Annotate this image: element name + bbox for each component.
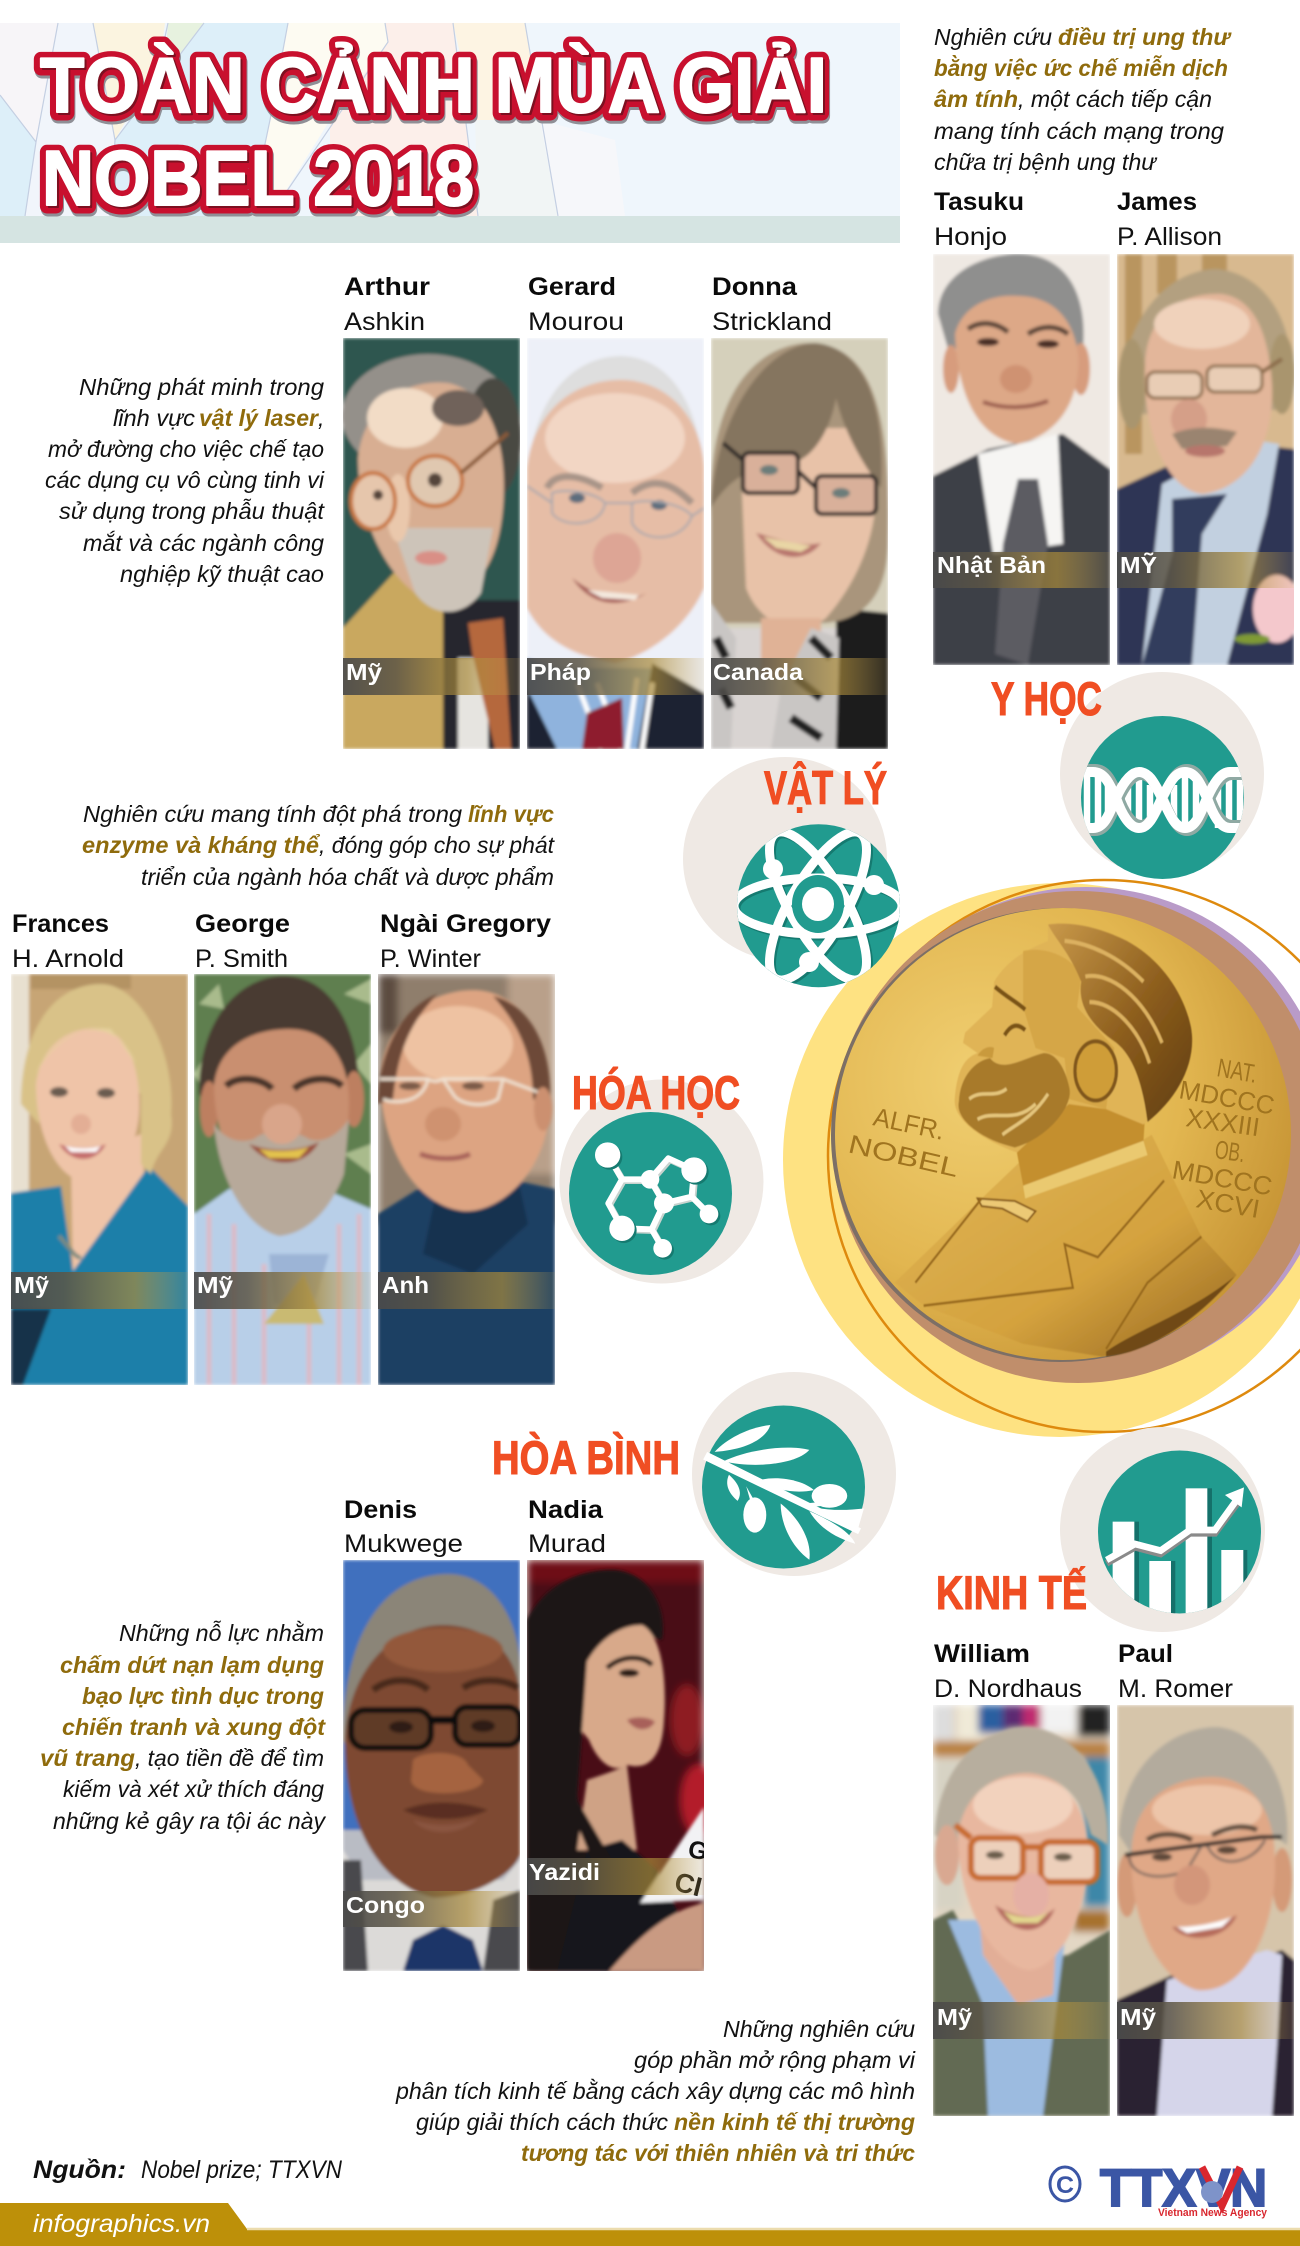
name: james p allison: P. Allison (1117, 223, 1222, 251)
icon: chemistry molecule (560, 1080, 764, 1284)
paper lettering (676, 1841, 704, 1896)
description: medicine: bằng việc ức chế miễn dịch (934, 54, 1228, 81)
portrait: tasuku honjo (933, 254, 1110, 665)
country bands: physics: Canada (713, 659, 803, 685)
description: peace: chấm dứt nạn lạm dụng (60, 1652, 324, 1678)
paper lettering: CI (672, 1867, 705, 1902)
heading: vat ly: VẬT LÝ (764, 761, 887, 814)
name: gerard mourou: Gerard (528, 273, 616, 301)
name: nadia murad: Nadia (528, 1496, 604, 1524)
portrait: arthur ashkin (342, 338, 521, 749)
name: denis mukwege (344, 1496, 463, 1558)
country bands: economics (933, 2002, 1294, 2039)
portrait: george p smith (194, 974, 371, 1385)
description: peace: chiến tranh và xung đột (62, 1714, 326, 1740)
coin face: XXXIII (1184, 1102, 1262, 1142)
name: arthur ashkin: Ashkin (344, 308, 425, 336)
icon: medicine dna (1060, 672, 1264, 879)
source note: Nobel prize; TTXVN (141, 2156, 343, 2184)
description: economics: Những nghiên cứu (723, 2016, 915, 2042)
icon: physics atom (683, 757, 904, 995)
name: gregory p winter: Ngài Gregory (380, 910, 551, 938)
description: medicine: âm tính (934, 86, 1018, 112)
footer site label: infographics.vn (33, 2210, 210, 2238)
icon: peace olive branch (692, 1372, 896, 1576)
name: gregory p winter (380, 910, 551, 973)
portrait: gregory p winter (378, 974, 555, 1385)
description: peace: Những nỗ lực nhằm (119, 1619, 324, 1646)
name: george p smith: George (195, 910, 290, 938)
paper lettering: G (686, 1835, 710, 1866)
footer band (0, 2203, 1300, 2246)
title: TOÀN CẢNH MÙA GIẢI (41, 45, 828, 133)
name: william d nordhaus (934, 1640, 1082, 1703)
country bands: medicine: MỸ (1120, 551, 1157, 578)
country bands: medicine: Nhật Bản (937, 552, 1046, 578)
title: NOBEL 2018 (43, 138, 475, 226)
title: NOBEL 2018 (42, 134, 474, 222)
description: medicine: , một cách tiếp cận (1018, 86, 1212, 112)
country bands: chemistry: Anh (382, 1272, 429, 1298)
description: physics: lĩnh vực (113, 405, 196, 431)
portrait: nadia murad (527, 1560, 717, 1971)
coin face: XCVI (1194, 1183, 1262, 1224)
portrait: james p allison (1117, 254, 1300, 665)
country bands: physics: Mỹ (346, 659, 382, 685)
panel: medicine (933, 24, 1300, 665)
name: paul m romer: M. Romer (1118, 1675, 1233, 1703)
description: peace: bạo lực tình dục trong (82, 1683, 324, 1709)
name: arthur ashkin (344, 273, 430, 336)
description: peace: những kẻ gây ra tội ác này (53, 1808, 326, 1834)
description: physics: sử dụng trong phẫu thuật (59, 497, 326, 524)
name: james p allison: James (1117, 188, 1197, 216)
heading: kinh te: KINH TẾ (936, 1566, 1087, 1619)
name: donna strickland: Donna (712, 273, 798, 301)
country bands: chemistry: Mỹ (14, 1272, 49, 1298)
description: medicine: điều trị ung thư (1058, 24, 1233, 50)
description: physics: các dụng cụ vô cùng tinh vi (45, 467, 325, 493)
description: physics (45, 374, 326, 587)
title: TOÀN CẢNH MÙA GIẢI (42, 43, 829, 131)
description: medicine: Nghiên cứu (934, 24, 1052, 50)
country bands: economics: Mỹ (1120, 2004, 1156, 2030)
description: physics: mắt và các ngành công (83, 530, 324, 556)
country bands: chemistry (11, 1272, 555, 1309)
name: donna strickland: Strickland (712, 308, 832, 336)
name: william d nordhaus: William (934, 1640, 1030, 1668)
title: TOÀN CẢNH MÙA GIẢI (40, 42, 827, 130)
heading: hoa hoc: HÓA HỌC (572, 1066, 740, 1119)
description: peace: kiếm và xét xử thích đáng (63, 1776, 324, 1802)
description: peace: , tạo tiền đề để tìm (135, 1745, 324, 1771)
description: chemistry: enzyme và kháng thể (82, 832, 320, 858)
portrait: paul romer (1117, 1705, 1294, 2116)
description: economics: góp phần mở rộng phạm vi (634, 2047, 916, 2073)
name: arthur ashkin: Arthur (344, 273, 430, 301)
coin face: ALFR. (871, 1102, 947, 1146)
description: economics: giúp giải thích cách thức (416, 2109, 668, 2135)
coin face: MDCCC (1177, 1074, 1277, 1121)
portrait: gerard mourou (527, 338, 705, 749)
source note (33, 2156, 343, 2184)
coin face: NOBEL (846, 1129, 962, 1183)
description: chemistry: lĩnh vực (468, 801, 554, 827)
heading: hoa binh: HÒA BÌNH (492, 1431, 680, 1484)
coin face: NAT. (1215, 1052, 1260, 1089)
description: chemistry: triển của ngành hóa chất và dược phẩm (141, 864, 554, 890)
nobel medal (783, 880, 1300, 1437)
name: frances h arnold: Frances (12, 910, 109, 938)
name: tasuku honjo: Tasuku (934, 188, 1024, 216)
country bands: medicine (933, 551, 1294, 588)
panel: peace (40, 1496, 717, 1971)
name: gregory p winter: P. Winter (380, 945, 481, 973)
panel: economics (395, 1640, 1294, 2166)
name: nadia murad (528, 1496, 606, 1558)
name: paul m romer: Paul (1118, 1640, 1173, 1668)
description: physics: , (318, 405, 324, 431)
portrait: frances arnold (11, 974, 188, 1385)
logo: ttxvn: C (1056, 2172, 1074, 2199)
description: physics: nghiệp kỹ thuật cao (120, 561, 324, 587)
icon: economics chart (1060, 1427, 1265, 1632)
name: tasuku honjo (934, 188, 1024, 251)
name: denis mukwege: Mukwege (344, 1530, 463, 1558)
coin face: OB. (1213, 1134, 1247, 1168)
panel: physics (45, 273, 888, 749)
description: economics: phân tích kinh tế bằng cách xây dựng các mô hình (395, 2078, 915, 2104)
panel: chemistry (11, 801, 556, 1385)
source note: Nguồn: (33, 2156, 126, 2184)
portrait: donna strickland (711, 338, 888, 749)
country bands: chemistry: Mỹ (197, 1272, 233, 1298)
name: william d nordhaus: D. Nordhaus (934, 1675, 1082, 1703)
coin face (835, 908, 1291, 1360)
heading: y hoc: Y HỌC (991, 672, 1102, 725)
description: chemistry: Nghiên cứu mang tính đột phá trong (83, 801, 462, 827)
name: frances h arnold (12, 910, 124, 973)
title (40, 41, 829, 226)
name: frances h arnold: H. Arnold (12, 945, 124, 973)
name: paul m romer (1118, 1640, 1233, 1703)
title: NOBEL 2018 (44, 136, 476, 224)
country bands: peace: Congo (346, 1892, 425, 1918)
description: physics: Những phát minh trong (79, 374, 324, 400)
name: gerard mourou (528, 273, 624, 336)
country bands: peace (343, 1858, 704, 1927)
name: gerard mourou: Mourou (528, 308, 624, 336)
description: economics (395, 2016, 916, 2166)
title: NOBEL 2018 (42, 135, 474, 223)
coin face: MDCCC (1170, 1154, 1275, 1201)
header banner (0, 23, 900, 243)
country bands: economics: Mỹ (937, 2004, 972, 2030)
description: economics: tương tác với thiên nhiên và tri thức (521, 2140, 915, 2166)
name: nadia murad: Murad (528, 1530, 606, 1558)
description: chemistry: , đóng góp cho sự phát (319, 832, 556, 858)
description: medicine: chữa trị bệnh ung thư (934, 149, 1157, 175)
description: medicine (934, 24, 1233, 175)
name: donna strickland (712, 273, 832, 336)
title: TOÀN CẢNH MÙA GIẢI (40, 41, 827, 129)
name: george p smith (195, 910, 290, 973)
country bands: peace: Yazidi (529, 1859, 600, 1885)
description: peace (40, 1619, 326, 1834)
logo: ttxvn: TTXVN (1100, 2159, 1267, 2218)
description: medicine: mang tính cách mạng trong (934, 118, 1224, 144)
description: peace: vũ trang (40, 1745, 135, 1771)
logo: ttxvn: Vietnam News Agency (1158, 2207, 1268, 2219)
description: economics: nền kinh tế thị trường (674, 2109, 915, 2135)
name: tasuku honjo: Honjo (934, 223, 1007, 251)
portrait: william nordhaus (933, 1705, 1110, 2116)
name: james p allison (1117, 188, 1222, 251)
name: george p smith: P. Smith (195, 945, 288, 973)
country bands: physics (343, 658, 888, 695)
name: denis mukwege: Denis (344, 1496, 417, 1524)
description: chemistry (82, 801, 556, 890)
description: physics: mở đường cho việc chế tạo (48, 436, 324, 462)
description: physics: vật lý laser (199, 405, 319, 431)
portrait: denis mukwege (343, 1560, 520, 1971)
country bands: physics: Pháp (530, 659, 591, 685)
